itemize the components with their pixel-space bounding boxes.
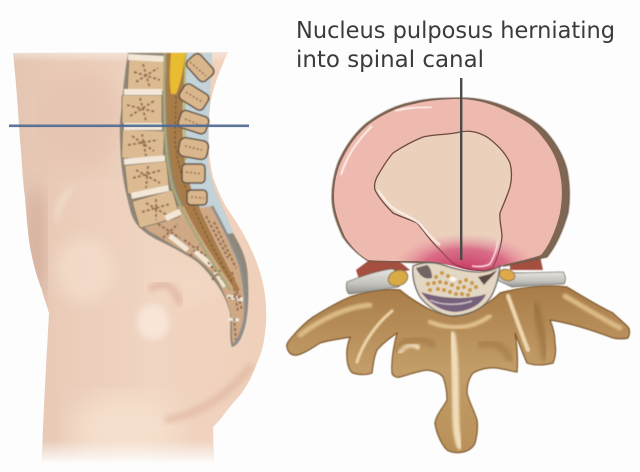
panel: axial view of disc and vertebra — [287, 78, 630, 453]
callout label: Nucleus pulposus herniating — [296, 18, 615, 44]
spinal canal — [166, 53, 240, 292]
spinal cord — [170, 53, 185, 94]
canal striations — [175, 96, 232, 282]
herniating nucleus pulposus — [375, 131, 515, 275]
bone highlights — [300, 296, 620, 446]
pointer line — [460, 78, 462, 260]
spinous processes — [177, 52, 216, 205]
white intervertebral discs — [124, 54, 243, 322]
posterior blue-grey soft tissue — [178, 53, 233, 235]
callout label — [296, 18, 615, 73]
torso body — [13, 52, 266, 462]
annulus fibrosus — [334, 99, 562, 271]
panel: side view of torso — [9, 52, 266, 462]
vertebral bodies — [121, 59, 180, 228]
sacral bone mass — [135, 205, 245, 345]
level marker line — [9, 124, 249, 127]
disc back shadow rim — [332, 98, 569, 266]
nerve rootlets — [426, 271, 478, 297]
spinous texture — [185, 62, 206, 198]
nerve root sleeves — [346, 268, 565, 294]
back grey rim of sacrum — [212, 206, 245, 345]
spine cross-section — [120, 52, 248, 347]
ligament stripe — [164, 53, 230, 290]
red ligament tissue — [356, 256, 543, 282]
vertebral arch — [287, 286, 630, 453]
spinal canal with cauda equina — [413, 263, 500, 316]
spine base shape — [120, 53, 248, 347]
callout label: into spinal canal — [296, 47, 484, 73]
bone trabecular texture — [127, 64, 242, 340]
